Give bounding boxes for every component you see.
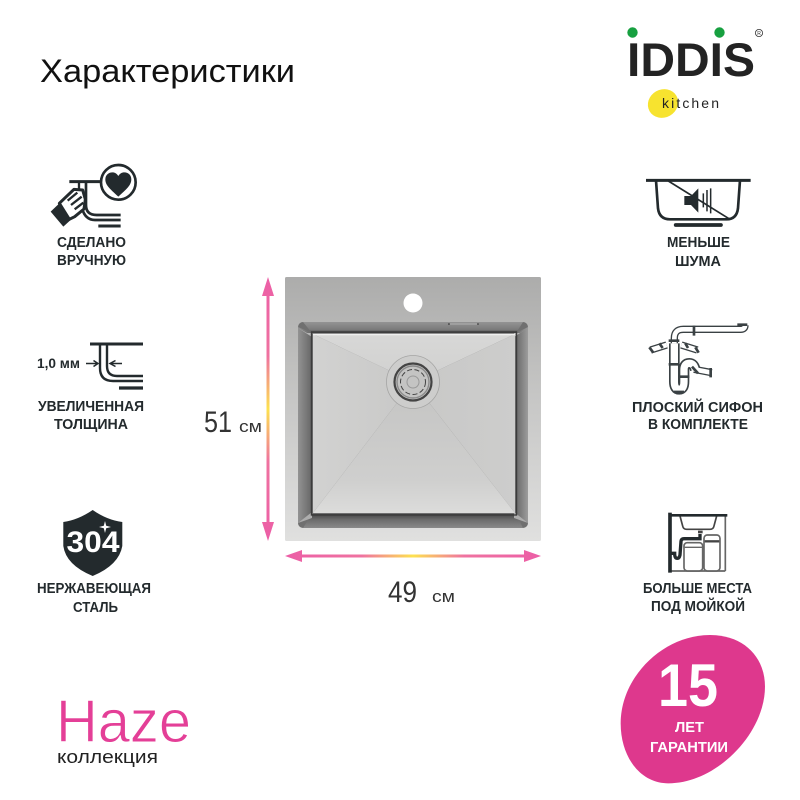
dimension: 49 cm: 49 xyxy=(388,576,417,609)
dimension: 51 cm: см xyxy=(239,417,262,436)
label: stainless steel: СТАЛЬ xyxy=(73,600,118,616)
caption: collection: коллекция xyxy=(57,747,158,767)
dimension: 51 cm: 51 xyxy=(204,406,232,439)
feature: flat siphon xyxy=(632,325,763,433)
icon: muted sink xyxy=(646,180,751,225)
label: more space under sink xyxy=(643,581,752,615)
label: flat siphon: ПЛОСКИЙ СИФОН xyxy=(632,398,763,416)
icon: cabinet xyxy=(670,513,727,573)
label: increased thickness xyxy=(38,399,144,433)
dimension: 1,0 mm: 1,0 мм xyxy=(37,355,80,371)
logo: IDDIS kitchen xyxy=(627,27,763,123)
feature: handmade xyxy=(51,165,136,269)
dimension: 49 cm xyxy=(388,576,455,609)
feature: increased thickness xyxy=(37,344,144,433)
label: handmade: ВРУЧНУЮ xyxy=(57,253,126,269)
label: flat siphon xyxy=(632,398,763,433)
sink plate xyxy=(285,277,541,541)
icon: wall thickness xyxy=(86,344,143,388)
drain xyxy=(386,356,440,408)
label: increased thickness: ТОЛЩИНА xyxy=(54,417,129,433)
arrow: width xyxy=(285,550,541,562)
label: more space under sink: БОЛЬШЕ МЕСТА xyxy=(643,581,752,597)
icon: 304 shield: 304 xyxy=(66,526,120,559)
basin walls xyxy=(298,322,528,528)
label: handmade: СДЕЛАНО xyxy=(57,235,126,251)
label: less noise: МЕНЬШЕ xyxy=(667,235,730,251)
label: stainless steel xyxy=(37,581,151,616)
logo: IDDIS kitchen: kitchen xyxy=(662,95,719,111)
basin floor xyxy=(313,334,515,513)
logo: IDDIS kitchen: IDDIS xyxy=(627,33,755,86)
warranty badge xyxy=(621,635,765,783)
label: more space under sink: ПОД МОЙКОЙ xyxy=(651,597,745,615)
logo: IDDIS kitchen: R xyxy=(757,31,761,37)
feature: more space under sink xyxy=(643,513,752,615)
collection name xyxy=(56,688,191,767)
label: handmade xyxy=(57,235,126,269)
feature: less noise xyxy=(646,180,751,270)
warranty text: ЛЕТ xyxy=(675,720,704,736)
badge blob xyxy=(621,635,765,783)
product: sink top view xyxy=(285,277,541,541)
icon: hand and heart xyxy=(51,165,136,227)
title: Характеристики xyxy=(40,53,295,89)
tap hole xyxy=(404,294,422,312)
dimension: 49 cm: см xyxy=(432,587,455,606)
dimension: 51 cm xyxy=(204,406,262,439)
arrow: height xyxy=(262,277,274,541)
warranty text xyxy=(650,720,728,756)
label: increased thickness: УВЕЛИЧЕННАЯ xyxy=(38,399,144,415)
label: stainless steel: НЕРЖАВЕЮЩАЯ xyxy=(37,581,151,597)
label: less noise xyxy=(667,235,730,270)
feature: stainless steel xyxy=(37,510,151,616)
label: flat siphon: В КОМПЛЕКТЕ xyxy=(648,417,748,433)
warranty text: ГАРАНТИИ xyxy=(650,740,728,756)
icon: siphon xyxy=(649,325,747,392)
label: less noise: ШУМА xyxy=(675,254,722,270)
number 15: 15 xyxy=(658,652,718,719)
heading: Haze: Haze xyxy=(56,688,191,755)
